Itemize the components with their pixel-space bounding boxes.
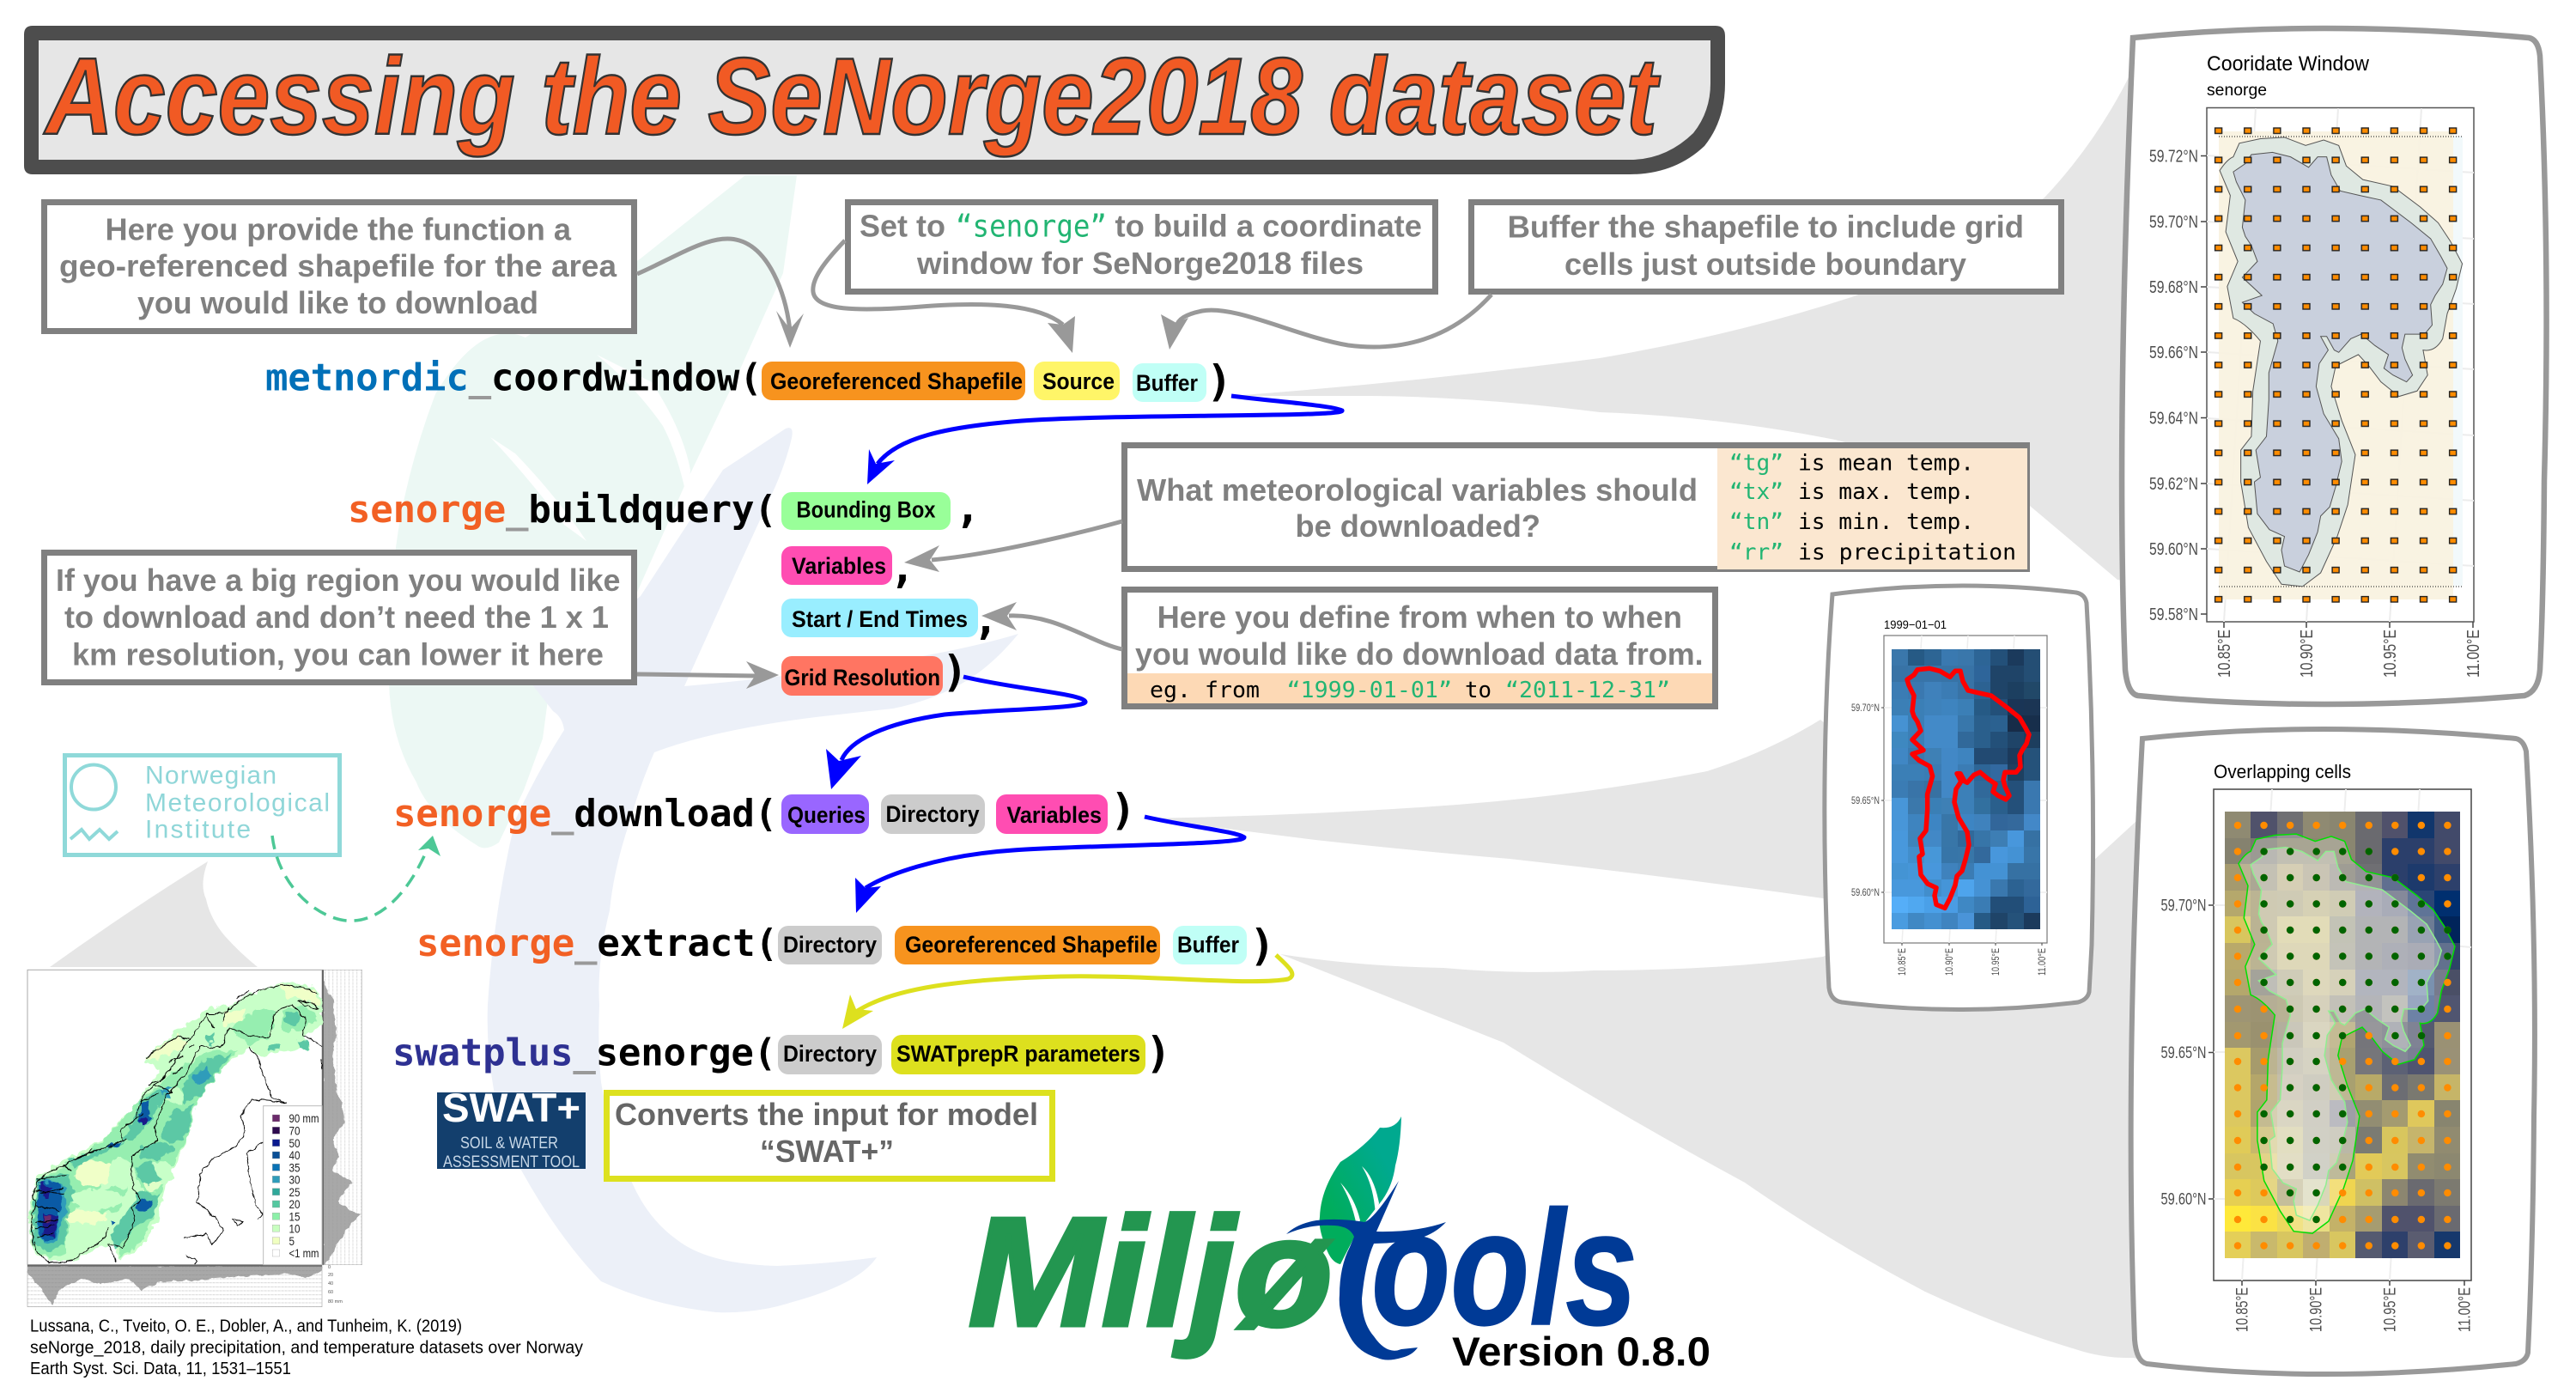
x axis labels (2215, 630, 2483, 678)
y axis labels: 59.60°N (2149, 540, 2198, 559)
function row: swatplus_senorge: swatplus_senorge( (392, 1031, 776, 1075)
logo: SWAT+: ASSESSMENT TOOL (443, 1153, 580, 1171)
y axis labels: 59.66°N (2149, 344, 2198, 362)
function row: senorge_download: senorge_download( (393, 792, 777, 836)
map: Norway precipitation: 30 (289, 1173, 301, 1187)
panel: coordinate window: senorge (2207, 82, 2267, 100)
arrow: buildquery to download (826, 677, 1085, 789)
y axis labels (2160, 897, 2207, 1209)
citation: Lussana, C., Tveito, O. E., Dobler, A., and Tunheim, K. (2019) (30, 1317, 462, 1336)
callout: shapefile: Here you provide the function a (105, 212, 572, 247)
logo: MiljoTools: Miljø (969, 1186, 1333, 1359)
y axis labels: 59.58°N (2149, 605, 2198, 624)
callout: variables: “rr” (1729, 539, 1783, 565)
arrow: dates callout to pill (981, 602, 1122, 649)
x axis labels (2234, 1287, 2475, 1332)
callout: variables: be downloaded? (1295, 508, 1540, 544)
x axis labels: 10.85°E (2215, 630, 2234, 678)
function row: senorge_buildquery: Bounding Box (797, 497, 936, 523)
arrow: coordwindow to buildquery (867, 396, 1342, 484)
callout: grid resolution: km resolution, you can lower it here (72, 637, 604, 672)
map: Norway precipitation: 20 (328, 1273, 333, 1278)
background: pale tree artwork (50, 69, 2233, 1374)
function row: senorge_buildquery: Grid Resolution (785, 665, 940, 690)
function row: senorge_extract: Directory (783, 932, 877, 958)
callout: shapefile (45, 203, 634, 332)
function row: senorge_buildquery (348, 483, 999, 696)
map: Norway precipitation: 15 (289, 1209, 301, 1223)
x axis labels: 10.90°E (2298, 630, 2317, 678)
callout: source (848, 203, 1436, 292)
function row: senorge_download (393, 785, 1136, 836)
map: Norway precipitation: 20 (289, 1197, 301, 1211)
callout: dates: “1999-01-01” (1286, 678, 1452, 703)
map: Norway precipitation (26, 967, 364, 1311)
callout: grid resolution (45, 553, 634, 682)
callout: dates (1125, 589, 1716, 706)
function row: senorge_download: ) (1110, 785, 1136, 835)
y axis labels: 59.70°N (1851, 703, 1880, 714)
function row: senorge_buildquery: senorge_buildquery( (348, 488, 777, 532)
callout: dates: eg. from (1150, 678, 1260, 703)
callout: source: Set to (860, 208, 945, 244)
callout: dates: “2011-12-31” (1505, 678, 1670, 703)
logo: Norwegian Meteorological Institute: Meteorological (145, 789, 330, 818)
x axis labels (1898, 948, 2048, 976)
arrow: buffer callout to pill (1161, 295, 1492, 350)
x axis labels: 10.95°E (1991, 948, 2002, 976)
y axis labels: 59.65°N (2160, 1044, 2207, 1062)
y axis labels (2149, 148, 2198, 624)
map: Norway precipitation: 10 (289, 1221, 301, 1235)
function row: metnordic_coordwindow (265, 356, 1232, 406)
function row: swatplus_senorge: Directory (783, 1041, 877, 1067)
callout: SWAT+ conversion: “SWAT+” (760, 1134, 894, 1169)
function row: senorge_download: Directory (886, 801, 979, 827)
callout: variables: “tn” (1729, 509, 1783, 535)
panel: single day raster (1825, 586, 2093, 1010)
plot title: 1999−01−01 (1884, 617, 1947, 631)
callout: variables: is min. temp. (1798, 509, 1974, 535)
function row: senorge_buildquery: ) (942, 647, 968, 696)
x axis labels: 10.90°E (2308, 1287, 2325, 1332)
callout: variables: is mean temp. (1798, 451, 1974, 477)
callout: variables: is max. temp. (1798, 479, 1974, 505)
x axis labels: 11.00°E (2456, 1287, 2475, 1332)
y axis labels: 59.64°N (2149, 409, 2198, 428)
map: Norway precipitation: 80 mm (328, 1299, 343, 1305)
arrow: extract to swatplus (842, 955, 1292, 1029)
logo: MiljoTools (969, 1116, 1637, 1360)
logo: SWAT+: SOIL & WATER (460, 1134, 558, 1153)
map: Norway precipitation: 90 mm (289, 1111, 319, 1125)
y axis labels (1851, 703, 1880, 898)
x axis labels: 10.95°E (2381, 630, 2400, 678)
function row: senorge_extract: Georeferenced Shapefile (905, 932, 1157, 958)
raster cells (1892, 649, 2040, 929)
x axis labels: 11.00°E (2464, 630, 2483, 678)
panel: overlapping cells (2131, 729, 2535, 1374)
y axis labels: 59.68°N (2149, 278, 2198, 297)
function row: senorge_buildquery: , (973, 594, 999, 644)
y axis labels: 59.70°N (2160, 897, 2207, 915)
x axis labels: 10.85°E (1898, 948, 1908, 976)
function row: metnordic_coordwindow: Source (1042, 368, 1115, 394)
map: Norway precipitation: 0 (328, 1265, 331, 1270)
arrow: grid callout to pill (637, 661, 779, 689)
x axis labels: 10.95°E (2382, 1287, 2399, 1332)
panel: coordinate window (2122, 28, 2547, 704)
grid points (2238, 825, 2448, 1245)
logo: Norwegian Meteorological Institute (65, 756, 340, 855)
version label: Version 0.8.0 (1452, 1329, 1710, 1374)
citation (30, 1317, 583, 1378)
y axis labels: 59.72°N (2149, 148, 2198, 167)
map: Norway precipitation: 5 (289, 1234, 295, 1248)
x axis labels: 10.85°E (2234, 1287, 2251, 1332)
function row: swatplus_senorge: SWATprepR parameters (896, 1041, 1140, 1067)
logo: SWAT+: SWAT+ (442, 1085, 580, 1130)
map: Norway precipitation: 50 (289, 1136, 301, 1150)
callout: dates: to (1465, 678, 1492, 703)
function row: metnordic_coordwindow: ) (1206, 356, 1232, 406)
map: Norway precipitation: 70 (289, 1123, 301, 1137)
function row: metnordic_coordwindow: metnordic_coordwindow( (265, 356, 762, 400)
map: Norway precipitation: 60 (328, 1290, 333, 1295)
callout: variables: “tg” (1729, 451, 1783, 477)
citation: Earth Syst. Sci. Data, 11, 1531–1551 (30, 1360, 291, 1378)
callout: source: “senorge” (956, 210, 1107, 244)
icon: leaf (1320, 1116, 1401, 1264)
function row: senorge_buildquery: Variables (792, 553, 886, 579)
arrow: source callout to pill (813, 240, 1075, 353)
title text: Accessing the SeNorge2018 dataset (43, 35, 1661, 157)
function row: senorge_extract: Buffer (1177, 932, 1239, 958)
callout: dates: Here you define from when to when (1157, 599, 1682, 635)
y axis labels: 59.60°N (1851, 888, 1880, 898)
y axis labels: 59.62°N (2149, 475, 2198, 494)
function row: swatplus_senorge: ) (1145, 1028, 1171, 1078)
function row: senorge_buildquery: , (890, 543, 915, 593)
function row: swatplus_senorge (392, 1028, 1171, 1078)
function row: senorge_buildquery: Start / End Times (792, 606, 968, 632)
y axis labels: 59.70°N (2149, 213, 2198, 232)
function row: metnordic_coordwindow: Buffer (1136, 370, 1198, 396)
map: Norway precipitation: 25 (289, 1185, 301, 1199)
y axis labels: 59.65°N (1851, 796, 1880, 806)
y axis labels: 59.60°N (2160, 1190, 2207, 1209)
arrow: variables callout to pill (904, 521, 1122, 572)
function row: senorge_extract: senorge_extract( (416, 922, 778, 965)
callout: buffer: Buffer the shapefile to include grid (1508, 210, 2024, 244)
callout: dates: you would like do download data from. (1135, 636, 1704, 672)
function row: senorge_download: Variables (1006, 802, 1102, 828)
callout: SWAT+ conversion (606, 1092, 1053, 1178)
arrow: download to extract (855, 817, 1244, 913)
callout: variables (1125, 445, 2027, 569)
map: Norway precipitation: 35 (289, 1161, 301, 1175)
plot title: Overlapping cells (2214, 761, 2351, 782)
map: Norway precipitation: <1 mm (289, 1246, 319, 1260)
arrow: dashed institute to download (272, 836, 440, 921)
callout: variables: What meteorological variables should (1137, 472, 1698, 508)
logo: MiljoTools: ools (1371, 1177, 1637, 1360)
citation: seNorge_2018, daily precipitation, and temperature datasets over Norway (30, 1339, 583, 1358)
arrow: shapefile callout to pill (637, 239, 804, 348)
function row: senorge_extract: ) (1249, 921, 1275, 970)
function row: metnordic_coordwindow: Georeferenced Shapefile (770, 368, 1023, 394)
callout: grid resolution: to download and don’t need the 1 x 1 (64, 599, 609, 635)
x axis labels: 10.90°E (1945, 948, 1955, 976)
logo: Norwegian Meteorological Institute: Norwegian (145, 761, 276, 790)
function row: senorge_buildquery: , (955, 483, 981, 532)
map: Norway precipitation: 40 (328, 1281, 333, 1287)
callout: variables: “tx” (1729, 479, 1783, 505)
callout: shapefile: you would like to download (137, 285, 538, 320)
callout: grid resolution: If you have a big region you would like (56, 563, 620, 598)
overlapping points (2264, 852, 2448, 1220)
function row: senorge_extract (416, 921, 1275, 970)
callout: buffer (1472, 203, 2061, 292)
title banner (24, 26, 1725, 174)
callout: variables: is precipitation (1798, 539, 2016, 565)
callout: buffer: cells just outside boundary (1564, 246, 1966, 282)
callout: SWAT+ conversion: Converts the input for model (615, 1097, 1038, 1132)
plot title: Cooridate Window (2207, 52, 2370, 76)
map: Norway precipitation: 40 (289, 1148, 301, 1162)
callout: shapefile: geo-referenced shapefile for the area (59, 248, 617, 283)
x axis labels: 11.00°E (2038, 948, 2048, 976)
callout: source: to build a coordinate (1115, 208, 1422, 244)
logo: SWAT+ (437, 1085, 586, 1171)
logo: Norwegian Meteorological Institute: Institute (145, 816, 251, 844)
function row: senorge_download: Queries (787, 802, 866, 828)
callout: source: window for SeNorge2018 files (916, 246, 1364, 281)
raster cells (2225, 812, 2460, 1258)
